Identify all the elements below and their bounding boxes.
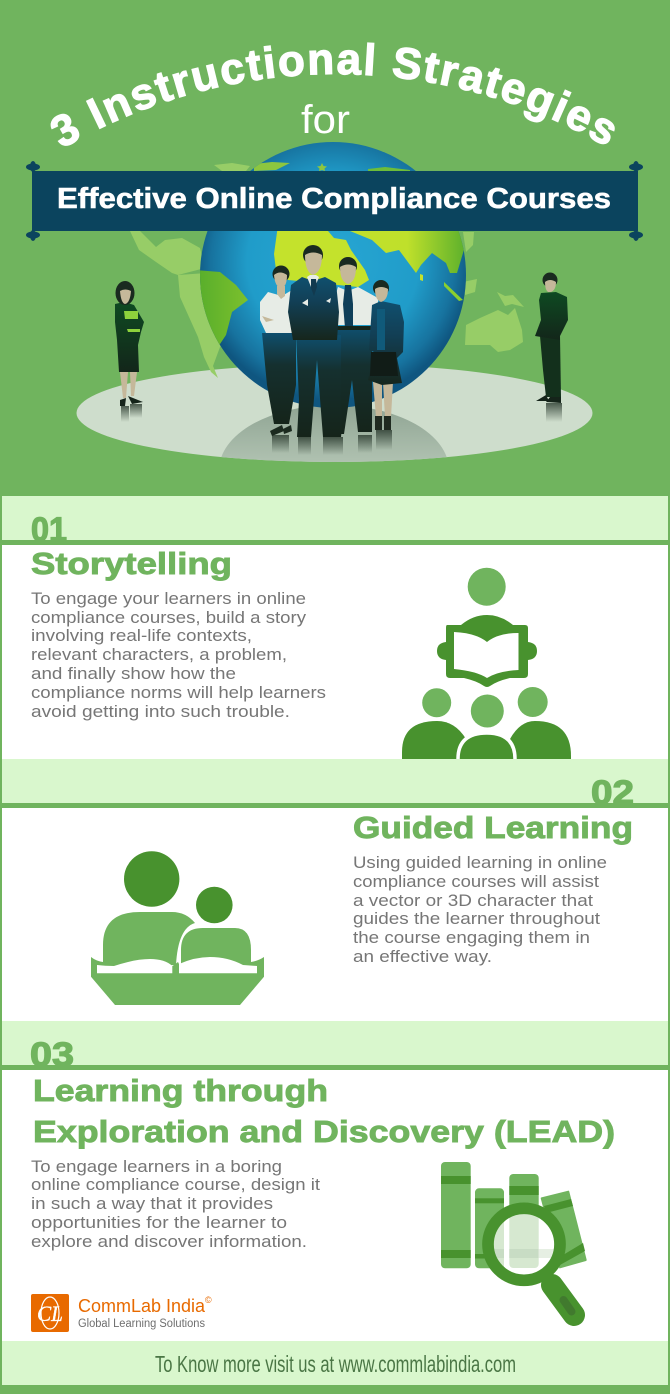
section 1 panel: storytelling	[0, 496, 670, 759]
section 1 body text	[31, 589, 326, 721]
section 2 body text	[353, 853, 607, 966]
logo: CommLab India	[31, 1294, 212, 1332]
section 1 body text: To engage your learners in online	[31, 589, 306, 608]
section 1 body text: avoid getting into such trouble.	[31, 702, 290, 721]
section 3 body text: To engage learners in a boring	[31, 1157, 282, 1176]
section 2 body text: an effective way.	[353, 947, 492, 966]
section 2 panel: guided learning	[0, 759, 670, 1021]
section 3 number: 03	[30, 1036, 74, 1074]
section 2 body text: compliance courses will assist	[353, 872, 599, 891]
section 3 body text: in such a way that it provides	[31, 1194, 273, 1213]
footer band	[2, 1341, 668, 1385]
section 2 number: 02	[591, 774, 634, 812]
section 1 body text: and finally show how the	[31, 664, 236, 683]
icon: teacher reading to group	[402, 568, 571, 759]
title: for: for	[301, 98, 350, 142]
person: woman in white shirt	[260, 266, 297, 436]
section 2 body text: the course engaging them in	[353, 928, 590, 947]
section 3 body text: opportunities for the learner to	[31, 1213, 287, 1232]
logo: CommLab India: ©	[205, 1295, 212, 1305]
section 3 body text	[31, 1157, 320, 1251]
reflections under feet	[121, 403, 562, 455]
banner text: Effective Online Compliance Courses	[57, 183, 611, 215]
title: curved heading: 3 Instructional Strategies	[50, 42, 615, 146]
section 2 body text: guides the learner throughout	[353, 909, 600, 928]
icon: books and magnifying glass	[441, 1162, 586, 1315]
section 2 heading: Guided Learning	[353, 810, 633, 845]
logo: CommLab India: Global Learning Solutions	[78, 1318, 205, 1330]
section 1 heading: Storytelling	[31, 546, 232, 581]
logo: CommLab India: CL	[37, 1301, 63, 1326]
section 3 heading: Learning through	[33, 1073, 328, 1108]
banner	[26, 161, 643, 241]
section 1 number: 01	[31, 511, 67, 549]
hero illustration: globe and people	[76, 142, 592, 462]
footer text: To Know more visit us at www.commlabindia.com	[155, 1351, 516, 1377]
section 1 body text: relevant characters, a problem,	[31, 645, 287, 664]
person: woman in black dress	[368, 280, 404, 430]
globe	[195, 142, 470, 408]
platform ellipse	[76, 364, 592, 462]
section 3 body text: online compliance course, design it	[31, 1175, 320, 1194]
platform shadow	[222, 406, 446, 462]
person: right man	[535, 272, 568, 403]
section 1 body text: compliance courses, build a story	[31, 608, 307, 627]
section 3 panel: LEAD	[0, 1021, 670, 1341]
section 3 heading: Exploration and Discovery (LEAD)	[33, 1114, 615, 1149]
person: man with tie	[330, 257, 378, 434]
person: central man in suit	[288, 245, 342, 437]
world map: faint continents	[130, 163, 524, 378]
section 1 body text: compliance norms will help learners	[31, 683, 326, 702]
section 3 body text: explore and discover information.	[31, 1232, 307, 1251]
icon: adult and child reading	[91, 851, 264, 1005]
section 2 body text: Using guided learning in online	[353, 853, 607, 872]
section 3 heading	[33, 1073, 615, 1149]
section 2 body text: a vector or 3D character that	[353, 891, 593, 910]
section 1 body text: involving real-life contexts,	[31, 626, 252, 645]
person: left woman with folder	[115, 281, 144, 406]
logo: CommLab India: CommLab India	[78, 1296, 206, 1316]
